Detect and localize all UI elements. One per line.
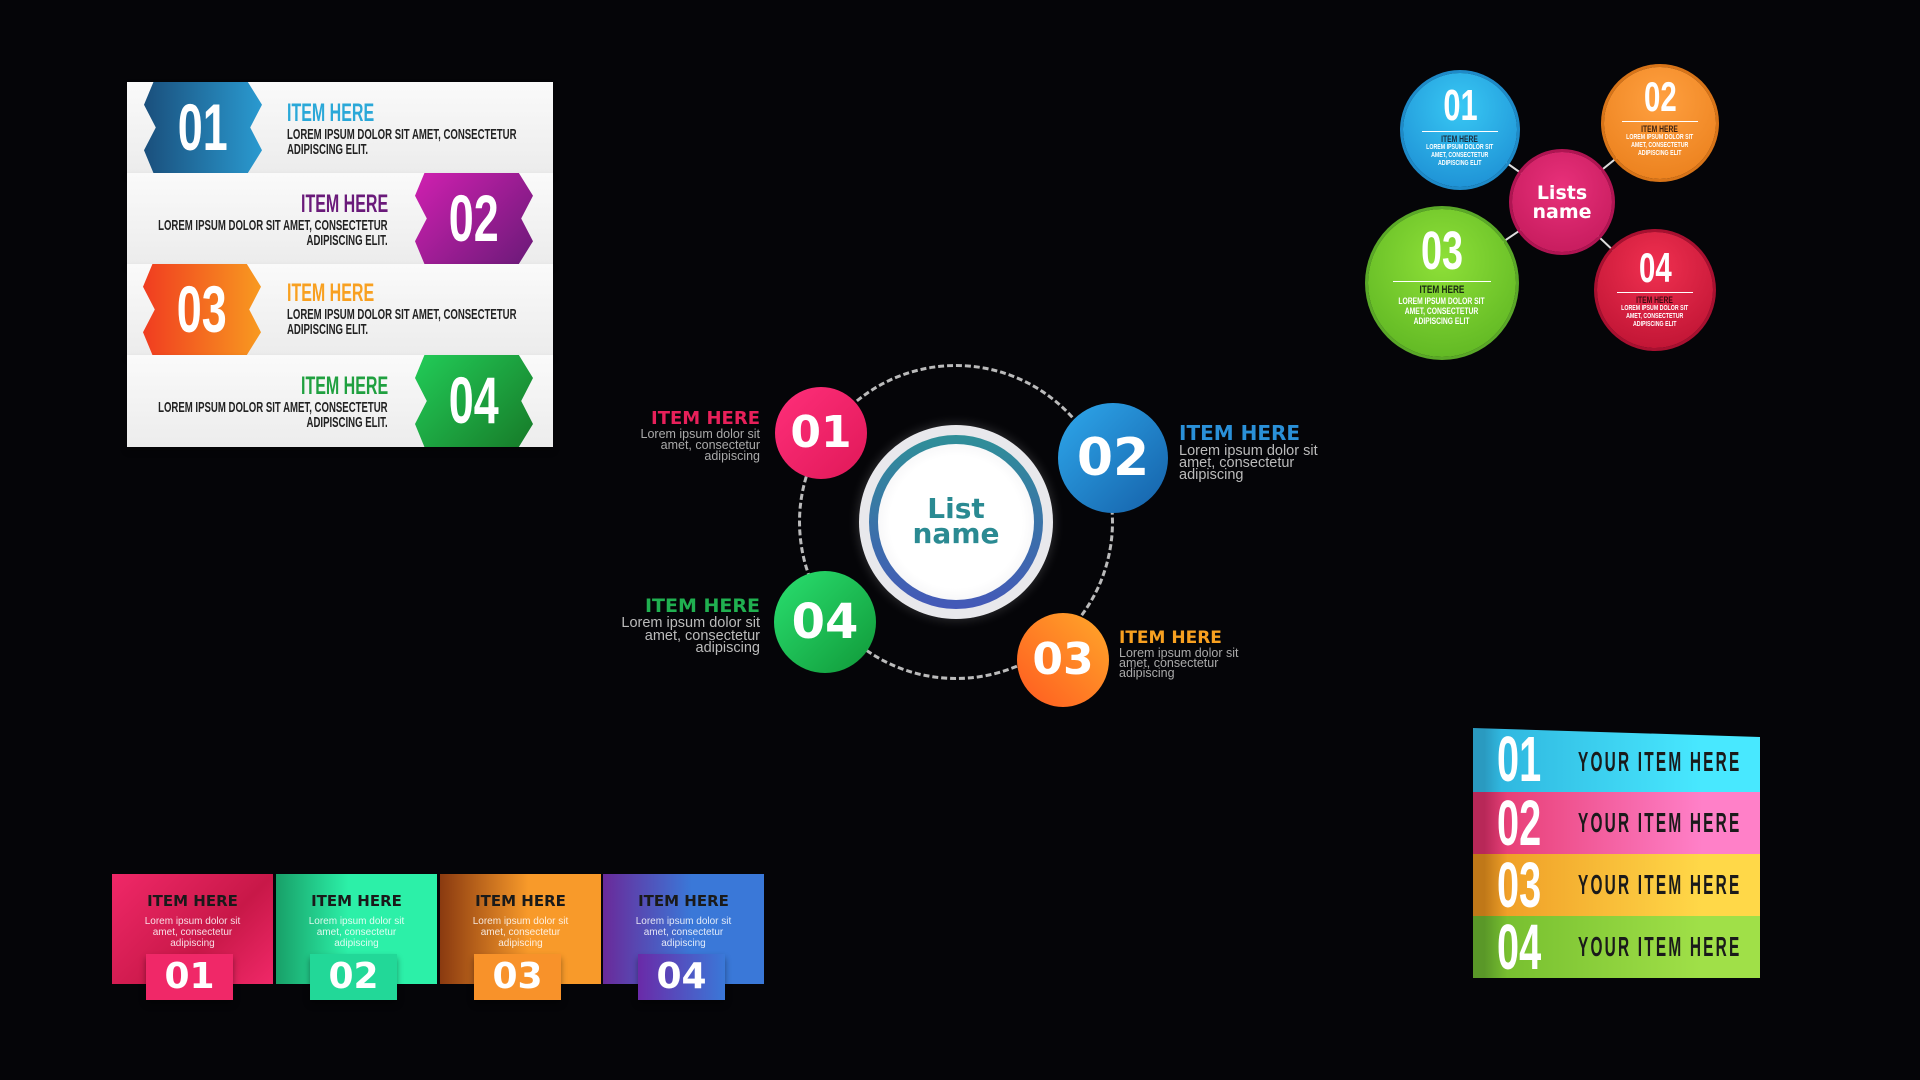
center circle: list name: name xyxy=(912,517,1000,550)
label 04: ITEM HERE xyxy=(645,595,760,617)
bar 04: YOUR ITEM HERE xyxy=(1578,931,1741,962)
bubble 02 xyxy=(1604,67,1716,179)
bubble 03: LOREM IPSUM DOLOR SIT xyxy=(1399,296,1485,306)
connector lines xyxy=(1502,157,1617,251)
bubble 01: ADIPISCING ELIT xyxy=(1438,160,1482,167)
label 02: adipiscing xyxy=(1179,467,1244,483)
title 02: ITEM HERE xyxy=(301,190,388,218)
bubble 04: LOREM IPSUM DOLOR SIT xyxy=(1621,305,1689,312)
box 02: adipiscing xyxy=(334,938,379,949)
node 03 xyxy=(1017,613,1109,707)
center bubble: lists name xyxy=(1512,152,1612,252)
box 01: adipiscing xyxy=(170,938,215,949)
bar 02 xyxy=(1473,792,1760,854)
label 04: adipiscing xyxy=(696,640,760,656)
row 3 xyxy=(127,264,553,355)
bubble 03: 03 xyxy=(1421,221,1463,281)
bubble 01: AMET, CONSECTETUR xyxy=(1431,152,1489,159)
label 01: Lorem ipsum dolor sit xyxy=(640,427,760,441)
bubble 04: AMET, CONSECTETUR xyxy=(1626,313,1684,320)
bubble 01: 01 xyxy=(1443,81,1477,130)
bar 01 xyxy=(1473,728,1760,792)
panel: circular diagram center xyxy=(621,364,1318,707)
row 1 xyxy=(127,82,553,173)
title 01: ITEM HERE xyxy=(287,99,374,127)
center bubble: lists name: Lists xyxy=(1537,182,1587,204)
label 03 xyxy=(1119,628,1238,680)
tab 03: 03 xyxy=(492,956,543,997)
text 01: LOREM IPSUM DOLOR SIT AMET, CONSECTETUR xyxy=(287,126,517,143)
box 03: amet, consectetur xyxy=(481,927,560,938)
bubble 02: LOREM IPSUM DOLOR SIT xyxy=(1626,134,1694,141)
row 4 xyxy=(127,355,553,447)
box 04: Lorem ipsum dolor sit xyxy=(636,916,731,927)
label 04 xyxy=(621,595,760,656)
center circle: list name xyxy=(859,425,1053,619)
tag 01 xyxy=(144,82,262,173)
label 03: amet, consectetur xyxy=(1119,656,1218,670)
node 01 xyxy=(775,387,867,479)
bubble 04: ADIPISCING ELIT xyxy=(1633,321,1677,328)
node 04: 04 xyxy=(792,594,858,650)
panel: ribbon list top-left xyxy=(127,82,553,447)
node 02 xyxy=(1058,403,1168,513)
text 03 xyxy=(287,306,517,338)
bubble 01 xyxy=(1403,73,1517,187)
tab 02: 02 xyxy=(328,956,379,997)
tab 04: 04 xyxy=(656,956,707,997)
bubble 03: ADIPISCING ELIT xyxy=(1414,316,1470,326)
tab 02 xyxy=(310,954,397,1000)
bubble 03: AMET, CONSECTETUR xyxy=(1405,306,1479,316)
node 02: 02 xyxy=(1077,428,1149,488)
box 02: ITEM HERE xyxy=(311,892,402,910)
label 01 xyxy=(640,408,760,463)
label 03: ITEM HERE xyxy=(1119,628,1222,648)
box 04 xyxy=(603,874,764,984)
bubble 04: 04 xyxy=(1639,244,1671,291)
label 02: ITEM HERE xyxy=(1179,421,1300,445)
box 02: Lorem ipsum dolor sit xyxy=(309,916,404,927)
tag 02 xyxy=(415,173,533,264)
box 03: Lorem ipsum dolor sit xyxy=(473,916,568,927)
tab 03 xyxy=(474,954,561,1000)
label 01: amet, consectetur xyxy=(661,438,760,452)
box 03: adipiscing xyxy=(498,938,543,949)
dashed orbit xyxy=(798,364,1114,680)
text 02 xyxy=(158,217,388,249)
bar 03: YOUR ITEM HERE xyxy=(1578,869,1741,900)
bubble 01: LOREM IPSUM DOLOR SIT xyxy=(1426,144,1494,151)
text 03: LOREM IPSUM DOLOR SIT AMET, CONSECTETUR xyxy=(287,306,517,323)
bar 01: YOUR ITEM HERE xyxy=(1578,746,1741,777)
tag 04 xyxy=(415,355,533,447)
bubble 02: ITEM HERE xyxy=(1642,124,1678,134)
tag 03 xyxy=(143,264,261,355)
node 03: 03 xyxy=(1032,634,1094,685)
bubble 04 xyxy=(1597,232,1713,348)
bubble 04: ITEM HERE xyxy=(1637,295,1673,305)
box 03: ITEM HERE xyxy=(475,892,566,910)
tab 04 xyxy=(638,954,725,1000)
bar 04 xyxy=(1473,916,1760,978)
box 04: ITEM HERE xyxy=(638,892,729,910)
bar 02: YOUR ITEM HERE xyxy=(1578,807,1741,838)
center circle: list name: List xyxy=(927,492,985,525)
panel: 3d bars bottom-right xyxy=(1473,728,1760,978)
tab 01 xyxy=(146,954,233,1000)
tag 04: 04 xyxy=(449,363,499,437)
node 04 xyxy=(774,571,876,673)
tag 03: 03 xyxy=(177,272,227,346)
box 02 xyxy=(276,874,437,984)
title 04: ITEM HERE xyxy=(301,372,388,400)
label 02: Lorem ipsum dolor sit xyxy=(1179,443,1318,459)
panel: bubble cluster top-right xyxy=(1365,64,1719,360)
text 04 xyxy=(158,399,388,431)
box 04: adipiscing xyxy=(661,938,706,949)
bubble 02: 02 xyxy=(1644,73,1676,120)
label 03: adipiscing xyxy=(1119,666,1175,680)
bubble 02: ADIPISCING ELIT xyxy=(1638,150,1682,157)
label 02 xyxy=(1179,421,1318,483)
node 01: 01 xyxy=(790,407,852,458)
center bubble: lists name: name xyxy=(1532,201,1592,223)
text 02: LOREM IPSUM DOLOR SIT AMET, CONSECTETUR xyxy=(158,217,388,234)
label 03: Lorem ipsum dolor sit xyxy=(1119,646,1238,660)
bubble 01: ITEM HERE xyxy=(1442,134,1478,144)
box 03 xyxy=(440,874,601,984)
text 01 xyxy=(287,126,517,158)
text 04: LOREM IPSUM DOLOR SIT AMET, CONSECTETUR xyxy=(158,399,388,416)
text 03: ADIPISCING ELIT. xyxy=(287,321,368,338)
bubble 02: AMET, CONSECTETUR xyxy=(1631,142,1689,149)
bubble 03: ITEM HERE xyxy=(1420,284,1464,296)
bar 03 xyxy=(1473,854,1760,916)
tag 02: 02 xyxy=(449,181,499,255)
label 02: amet, consectetur xyxy=(1179,455,1294,471)
text 01: ADIPISCING ELIT. xyxy=(287,141,368,158)
panel: colored boxes bottom-left xyxy=(112,874,764,1000)
box 04: amet, consectetur xyxy=(644,927,723,938)
box 01: ITEM HERE xyxy=(147,892,238,910)
title 03: ITEM HERE xyxy=(287,279,374,307)
box 01 xyxy=(112,874,273,984)
label 01: adipiscing xyxy=(704,449,760,463)
text 04: ADIPISCING ELIT. xyxy=(307,414,388,431)
bubble 03 xyxy=(1368,209,1516,357)
label 01: ITEM HERE xyxy=(651,408,760,429)
label 04: amet, consectetur xyxy=(645,628,760,644)
tag 01: 01 xyxy=(178,90,228,164)
box 02: amet, consectetur xyxy=(317,927,396,938)
label 04: Lorem ipsum dolor sit xyxy=(621,615,760,631)
row 2 xyxy=(127,173,553,264)
box 01: Lorem ipsum dolor sit xyxy=(145,916,240,927)
box 01: amet, consectetur xyxy=(153,927,232,938)
tab 01: 01 xyxy=(164,956,215,997)
text 02: ADIPISCING ELIT. xyxy=(307,232,388,249)
